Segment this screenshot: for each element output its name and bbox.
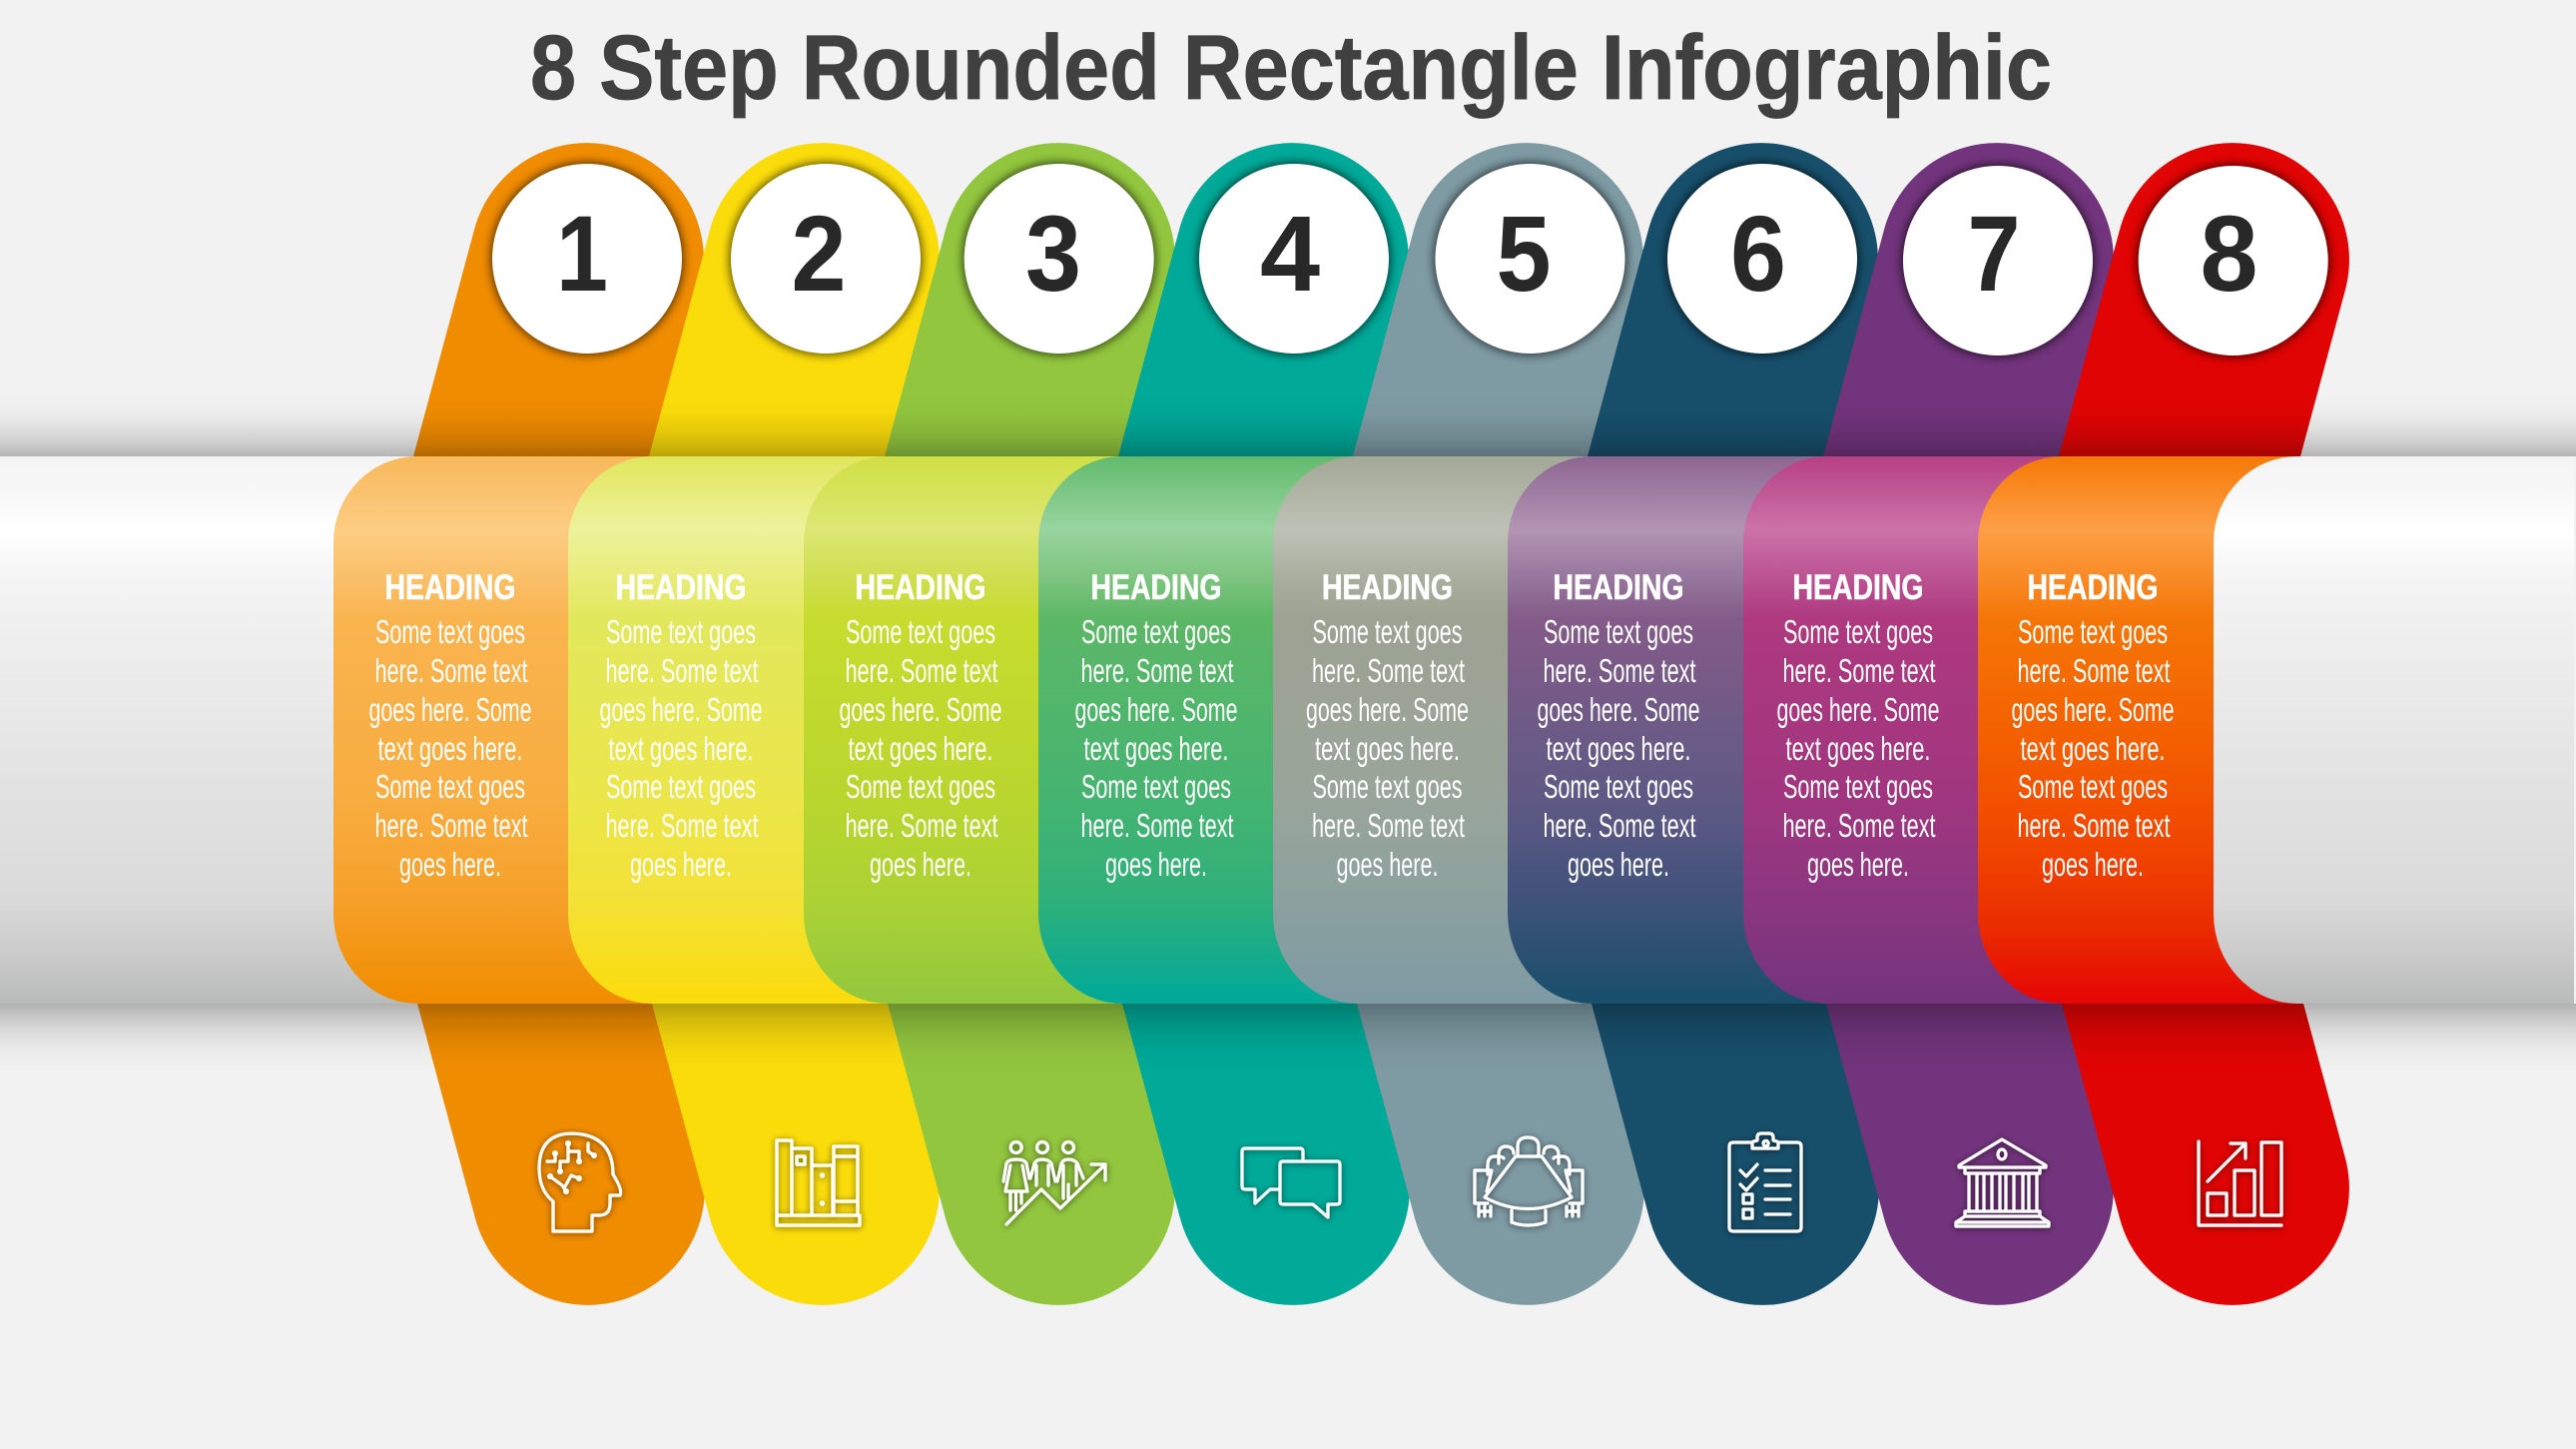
step 5 text: here. Some text: [1312, 652, 1465, 689]
icon: books on shelf: [777, 1140, 860, 1225]
step 8 text: HEADING: [2027, 568, 2159, 607]
step 2 text: HEADING: [615, 568, 747, 607]
step 5 text: goes here. Some: [1306, 691, 1469, 728]
icon: people with rising arrow: [1003, 1142, 1105, 1224]
step 8 text: Some text goes: [2018, 768, 2168, 805]
title: 8 Step Rounded Rectangle Infographic: [530, 17, 2052, 119]
step 6 text: [1538, 568, 1699, 883]
pill 5 bottom: [1357, 1004, 1644, 1305]
pill 4 top: [1118, 143, 1409, 456]
step 5 text: [1306, 568, 1469, 883]
step 1 text: [369, 568, 531, 883]
number badge 2: 2: [791, 193, 847, 314]
tab 5 panel: [1273, 456, 1592, 1004]
pill 2 bottom: [652, 1004, 940, 1305]
step 8 text: goes here.: [2042, 846, 2144, 883]
tab 4 panel: [1038, 456, 1357, 1004]
pill 3 top: [885, 143, 1175, 456]
step 3 text: goes here.: [870, 846, 971, 883]
step 7 text: [1777, 568, 1939, 883]
icon: head with circuit brain: [539, 1133, 621, 1231]
step 8 text: [2011, 568, 2175, 883]
icon: bar chart with arrow: [2199, 1141, 2281, 1225]
step 8 text: here. Some text: [2017, 652, 2171, 689]
step 7 text: Some text goes: [1783, 613, 1933, 650]
step 8 text: Some text goes: [2018, 613, 2168, 650]
step 6 text: Some text goes: [1544, 768, 1693, 805]
step 8 text: text goes here.: [2021, 730, 2165, 767]
number badge 4: 4: [1260, 193, 1320, 314]
step 3 text: here. Some text: [845, 652, 998, 689]
step 4 text: HEADING: [1090, 568, 1222, 607]
step 5 text: HEADING: [1322, 568, 1453, 607]
pill 8 top: [2059, 143, 2349, 456]
step 6 text: HEADING: [1554, 568, 1683, 607]
tab 3 panel: [804, 456, 1122, 1004]
step 2 text: here. Some text: [605, 807, 759, 844]
step 2 text: text goes here.: [609, 730, 753, 767]
step 4 text: Some text goes: [1081, 613, 1231, 650]
step 7 text: Some text goes: [1783, 768, 1933, 805]
pill 5 top: [1353, 143, 1643, 456]
tab 2 panel: [568, 456, 888, 1004]
pill 4 bottom: [1122, 1004, 1410, 1305]
number badge 2: [729, 162, 923, 356]
step 7 text: HEADING: [1793, 568, 1923, 607]
pill 7 top: [1823, 143, 2114, 456]
step 4 text: [1074, 568, 1238, 883]
step 5 text: Some text goes: [1312, 768, 1462, 805]
step 6 text: here. Some text: [1544, 807, 1695, 844]
step 4 text: goes here. Some: [1074, 691, 1238, 728]
number badge 7: 7: [1967, 193, 2021, 314]
number badge 6: 6: [1730, 193, 1786, 314]
tab 6 panel: [1508, 456, 1827, 1004]
white horizontal band: [0, 456, 2574, 1004]
step 4 text: Some text goes: [1081, 768, 1231, 805]
pill 8 bottom: [2062, 1004, 2349, 1305]
step 6 text: text goes here.: [1546, 730, 1691, 767]
step 3 text: here. Some text: [845, 807, 998, 844]
step 4 text: goes here.: [1105, 846, 1207, 883]
step 6 text: goes here. Some: [1538, 691, 1699, 728]
step 8 text: here. Some text: [2017, 807, 2171, 844]
icon: meeting table: [1475, 1137, 1583, 1225]
step 1 text: Some text goes: [375, 768, 525, 805]
pill 2 top: [649, 143, 940, 456]
step 1 text: text goes here.: [377, 730, 523, 767]
pill 1 top: [413, 143, 704, 456]
step 5 text: goes here.: [1336, 846, 1438, 883]
number badge 4: [1197, 162, 1391, 356]
step 3 text: Some text goes: [846, 613, 995, 650]
step 4 text: here. Some text: [1080, 652, 1234, 689]
step 1 text: goes here. Some: [369, 691, 531, 728]
step 2 text: here. Some text: [605, 652, 759, 689]
step 7 text: goes here.: [1807, 846, 1909, 883]
number badge 1: 1: [556, 193, 608, 314]
step 2 text: Some text goes: [606, 613, 756, 650]
number badge 8: 8: [2201, 193, 2258, 314]
step 1 text: Some text goes: [375, 613, 525, 650]
pill 3 bottom: [888, 1004, 1175, 1305]
step 1 text: here. Some text: [375, 652, 527, 689]
icon: clipboard checklist: [1729, 1133, 1801, 1231]
step 2 text: Some text goes: [606, 768, 756, 805]
pill 6 bottom: [1592, 1004, 1879, 1305]
step 1 text: goes here.: [399, 846, 501, 883]
tab 8 panel: [1978, 456, 2298, 1004]
number badge 3: 3: [1025, 193, 1081, 314]
pill 6 top: [1588, 143, 1878, 456]
lower pill tabs: [417, 1004, 2349, 1305]
step 4 text: here. Some text: [1080, 807, 1234, 844]
step 2 text: [599, 568, 763, 883]
step 3 text: Some text goes: [846, 768, 995, 805]
tab 1 panel: [333, 456, 653, 1004]
tab 7 panel: [1743, 456, 2062, 1004]
step 5 text: here. Some text: [1312, 807, 1465, 844]
step 5 text: text goes here.: [1315, 730, 1460, 767]
number badge 3: [963, 162, 1156, 356]
upper pill tabs: [413, 143, 2349, 456]
step 3 text: text goes here.: [849, 730, 992, 767]
step 1 text: here. Some text: [375, 807, 527, 844]
step 5 text: Some text goes: [1312, 613, 1462, 650]
step 4 text: text goes here.: [1084, 730, 1228, 767]
step 7 text: here. Some text: [1783, 807, 1935, 844]
step 1 text: HEADING: [385, 568, 515, 607]
step 7 text: here. Some text: [1783, 652, 1935, 689]
step 3 text: HEADING: [855, 568, 986, 607]
step 2 text: goes here. Some: [599, 691, 763, 728]
step 2 text: goes here.: [630, 846, 732, 883]
number badge 7: [1901, 164, 2095, 358]
step 6 text: goes here.: [1568, 846, 1669, 883]
step 6 text: here. Some text: [1544, 652, 1695, 689]
band right end cap: [2214, 456, 2574, 1004]
number badge 1: [490, 162, 684, 356]
step 7 text: goes here. Some: [1777, 691, 1939, 728]
number badge 5: 5: [1496, 193, 1552, 314]
number badge 6: [1665, 162, 1859, 356]
pill 1 bottom: [417, 1004, 705, 1305]
icon: bank building: [1956, 1139, 2049, 1226]
step 7 text: text goes here.: [1785, 730, 1931, 767]
number badge 5: [1434, 162, 1627, 356]
step 3 text: goes here. Some: [839, 691, 1002, 728]
icon: speech bubbles: [1242, 1148, 1340, 1217]
step 6 text: Some text goes: [1544, 613, 1693, 650]
step 3 text: [839, 568, 1002, 883]
step 8 text: goes here. Some: [2011, 691, 2175, 728]
pill 7 bottom: [1826, 1004, 2114, 1305]
number badge 8: [2137, 164, 2330, 358]
